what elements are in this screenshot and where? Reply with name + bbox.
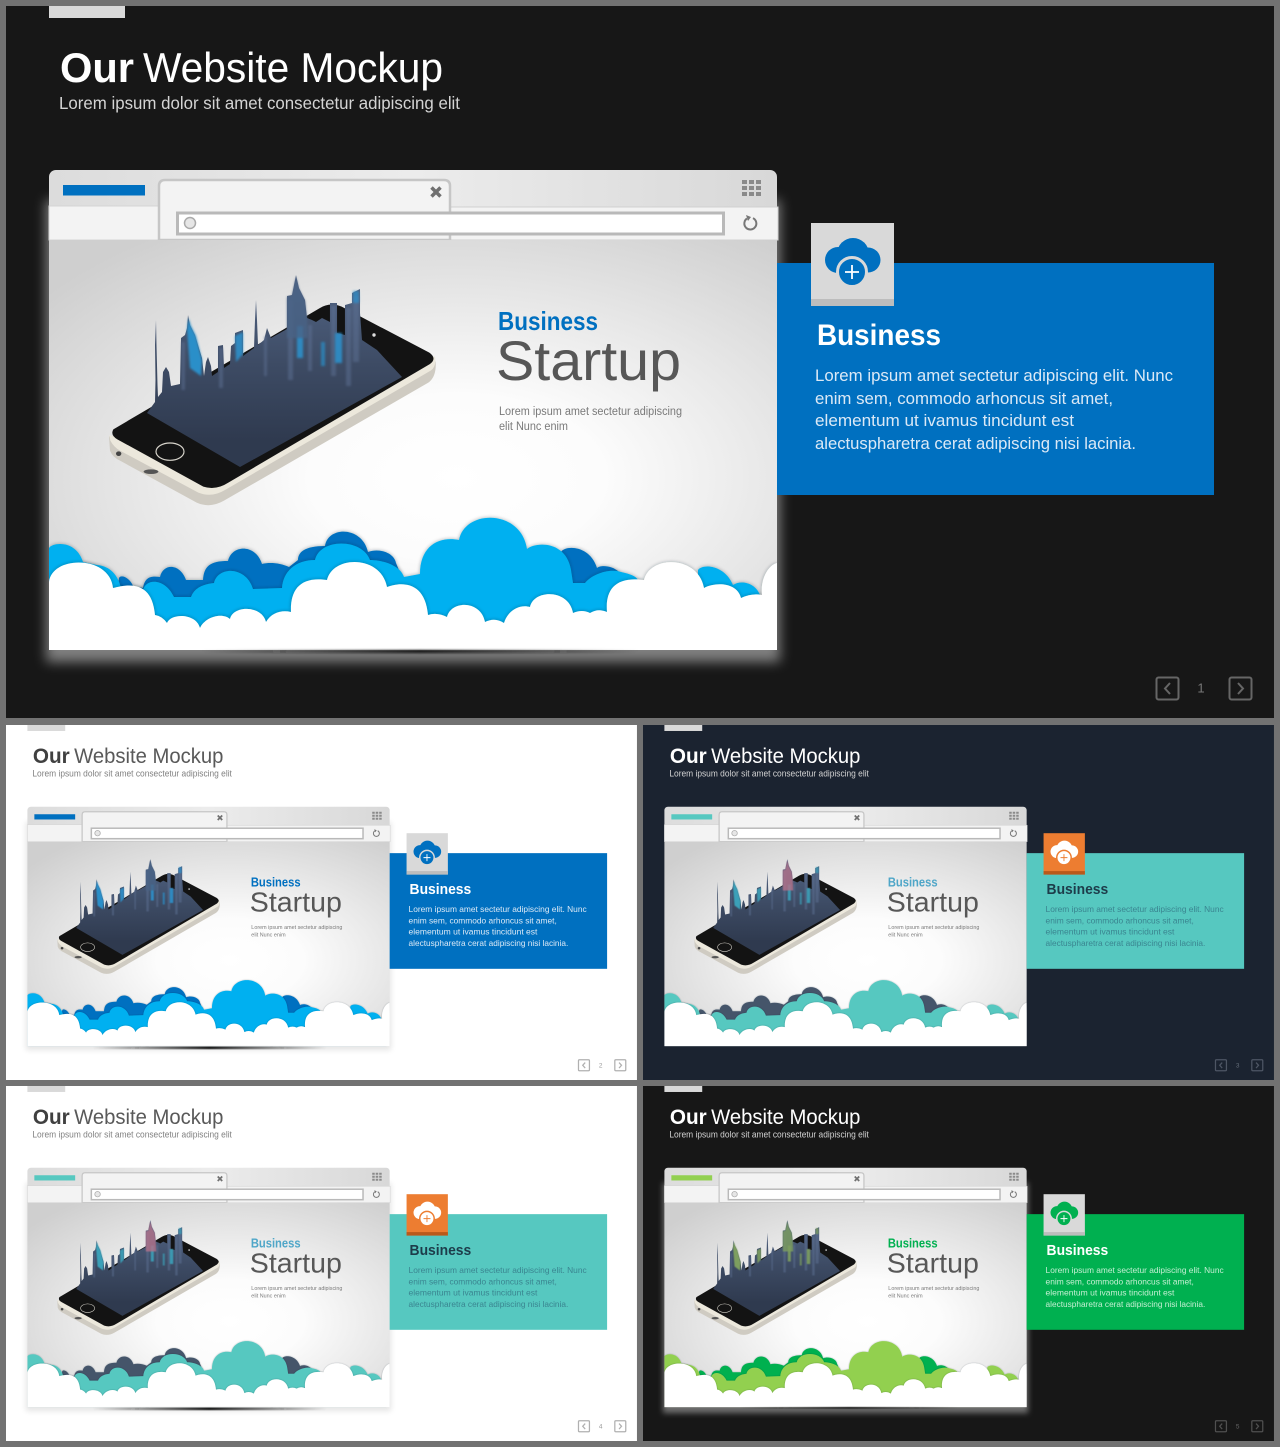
pagination [578,1421,626,1432]
browser caption [888,925,979,938]
heading: Business Startup: Business [251,875,301,890]
browser caption [251,925,342,938]
panel text: enim sem, commodo arhoncus sit amet, [1046,1276,1194,1286]
panel text: alectuspharetra cerat adipiscing nisi lacinia. [815,434,1136,453]
subtitle: Lorem ipsum dolor sit amet consectetur adipiscing elit [32,1129,232,1139]
info panel [1027,853,1244,969]
browser caption: Lorem ipsum amet sectetur adipiscing [251,1286,342,1292]
slide 2: white blue theme [6,725,637,1080]
pagination [1215,1421,1263,1432]
title: Our [33,745,70,768]
browser caption: Lorem ipsum amet sectetur adipiscing [888,925,979,931]
title: Our [670,745,707,768]
panel text: alectuspharetra cerat adipiscing nisi lacinia. [1046,938,1205,948]
browser window [664,1168,1027,1407]
title: Website Mockup [143,44,443,91]
title: Our [670,1106,707,1129]
pagination: 2 [599,1062,603,1069]
heading: Business Startup: Business [888,1236,938,1251]
title: Our [33,1106,70,1129]
panel text: Lorem ipsum amet sectetur adipiscing elit. Nunc [409,904,587,914]
info panel [390,1214,607,1330]
clouds [27,980,391,1047]
icon: cloud plus [811,223,894,306]
panel heading: Business [817,319,941,352]
subtitle: Lorem ipsum dolor sit amet consectetur adipiscing elit [669,1129,869,1139]
panel text: Lorem ipsum amet sectetur adipiscing elit. Nunc [1046,904,1224,914]
browser caption: elit Nunc enim [251,932,286,938]
browser caption: Lorem ipsum amet sectetur adipiscing [251,925,342,931]
browser caption: elit Nunc enim [251,1293,286,1299]
browser caption [888,1286,979,1299]
heading: Business Startup: Business [251,1236,301,1251]
panel text: enim sem, commodo arhoncus sit amet, [815,389,1113,408]
slide 1: large dark blue theme [6,6,1274,718]
panel text [409,904,587,948]
subtitle: Lorem ipsum dolor sit amet consectetur adipiscing elit [669,768,869,778]
browser caption: elit Nunc enim [499,421,568,433]
clouds [27,1341,391,1408]
info panel [777,263,1214,495]
browser caption [251,1286,342,1299]
browser window [27,807,390,1046]
browser window [27,1168,390,1407]
panel heading: Business [1047,1242,1108,1259]
panel heading: Business [1047,881,1108,898]
heading: Business Startup: Startup [496,329,681,392]
icon: cloud plus [1044,1194,1085,1236]
title: Website Mockup [74,745,223,768]
subtitle: Lorem ipsum dolor sit amet consectetur adipiscing elit [59,93,460,113]
panel text: elementum ut ivamus tincidunt est [409,1287,538,1297]
browser window [49,170,778,650]
browser caption [499,406,682,433]
slide 5: dark green theme [643,1086,1274,1441]
panel text [815,366,1173,453]
clouds [664,1341,1028,1408]
phone with city skyline [694,1220,857,1335]
panel text: elementum ut ivamus tincidunt est [1046,1287,1175,1297]
heading: Business Startup: Business [498,306,598,336]
panel text: alectuspharetra cerat adipiscing nisi lacinia. [409,1299,568,1309]
panel text: Lorem ipsum amet sectetur adipiscing elit. Nunc [409,1265,587,1275]
clouds [664,980,1028,1047]
title: Website Mockup [74,1106,223,1129]
subtitle: Lorem ipsum dolor sit amet consectetur adipiscing elit [32,768,232,778]
icon: cloud plus [407,1194,448,1236]
title: Website Mockup [711,745,860,768]
phone with city skyline [57,859,220,974]
panel text: alectuspharetra cerat adipiscing nisi lacinia. [1046,1299,1205,1309]
heading: Business Startup: Startup [887,1247,979,1278]
panel text: enim sem, commodo arhoncus sit amet, [1046,915,1194,925]
panel text: Lorem ipsum amet sectetur adipiscing elit. Nunc [1046,1265,1224,1275]
info panel [1027,1214,1244,1330]
title: Website Mockup [711,1106,860,1129]
panel text: enim sem, commodo arhoncus sit amet, [409,1276,557,1286]
panel text: elementum ut ivamus tincidunt est [409,926,538,936]
panel text: alectuspharetra cerat adipiscing nisi lacinia. [409,938,568,948]
info panel [390,853,607,969]
title: Our [60,44,134,91]
heading: Business Startup: Business [888,875,938,890]
panel text: Lorem ipsum amet sectetur adipiscing elit. Nunc [815,366,1173,385]
panel text: elementum ut ivamus tincidunt est [1046,926,1175,936]
panel heading: Business [410,881,471,898]
icon: cloud plus [407,833,448,875]
phone with city skyline [109,275,436,505]
slide 3: navy teal theme [643,725,1274,1080]
browser caption: elit Nunc enim [888,1293,923,1299]
panel text: enim sem, commodo arhoncus sit amet, [409,915,557,925]
panel text [409,1265,587,1309]
pagination: 5 [1236,1423,1240,1430]
browser caption: Lorem ipsum amet sectetur adipiscing [888,1286,979,1292]
clouds [49,518,780,652]
heading: Business Startup: Startup [887,886,979,917]
panel text: elementum ut ivamus tincidunt est [815,411,1074,430]
icon: cloud plus [1044,833,1085,875]
phone with city skyline [694,859,857,974]
pagination [1215,1060,1263,1071]
pagination: 4 [599,1423,603,1430]
panel heading: Business [410,1242,471,1259]
pagination: 3 [1236,1062,1240,1069]
slide 4: white teal theme [6,1086,637,1441]
heading: Business Startup: Startup [250,886,342,917]
pagination: 1 [1197,680,1205,696]
browser caption: Lorem ipsum amet sectetur adipiscing [499,406,682,418]
heading: Business Startup: Startup [250,1247,342,1278]
phone with city skyline [57,1220,220,1335]
pagination [1156,678,1252,700]
panel text [1046,1265,1224,1309]
browser caption: elit Nunc enim [888,932,923,938]
browser window [664,807,1027,1046]
panel text [1046,904,1224,948]
pagination [578,1060,626,1071]
